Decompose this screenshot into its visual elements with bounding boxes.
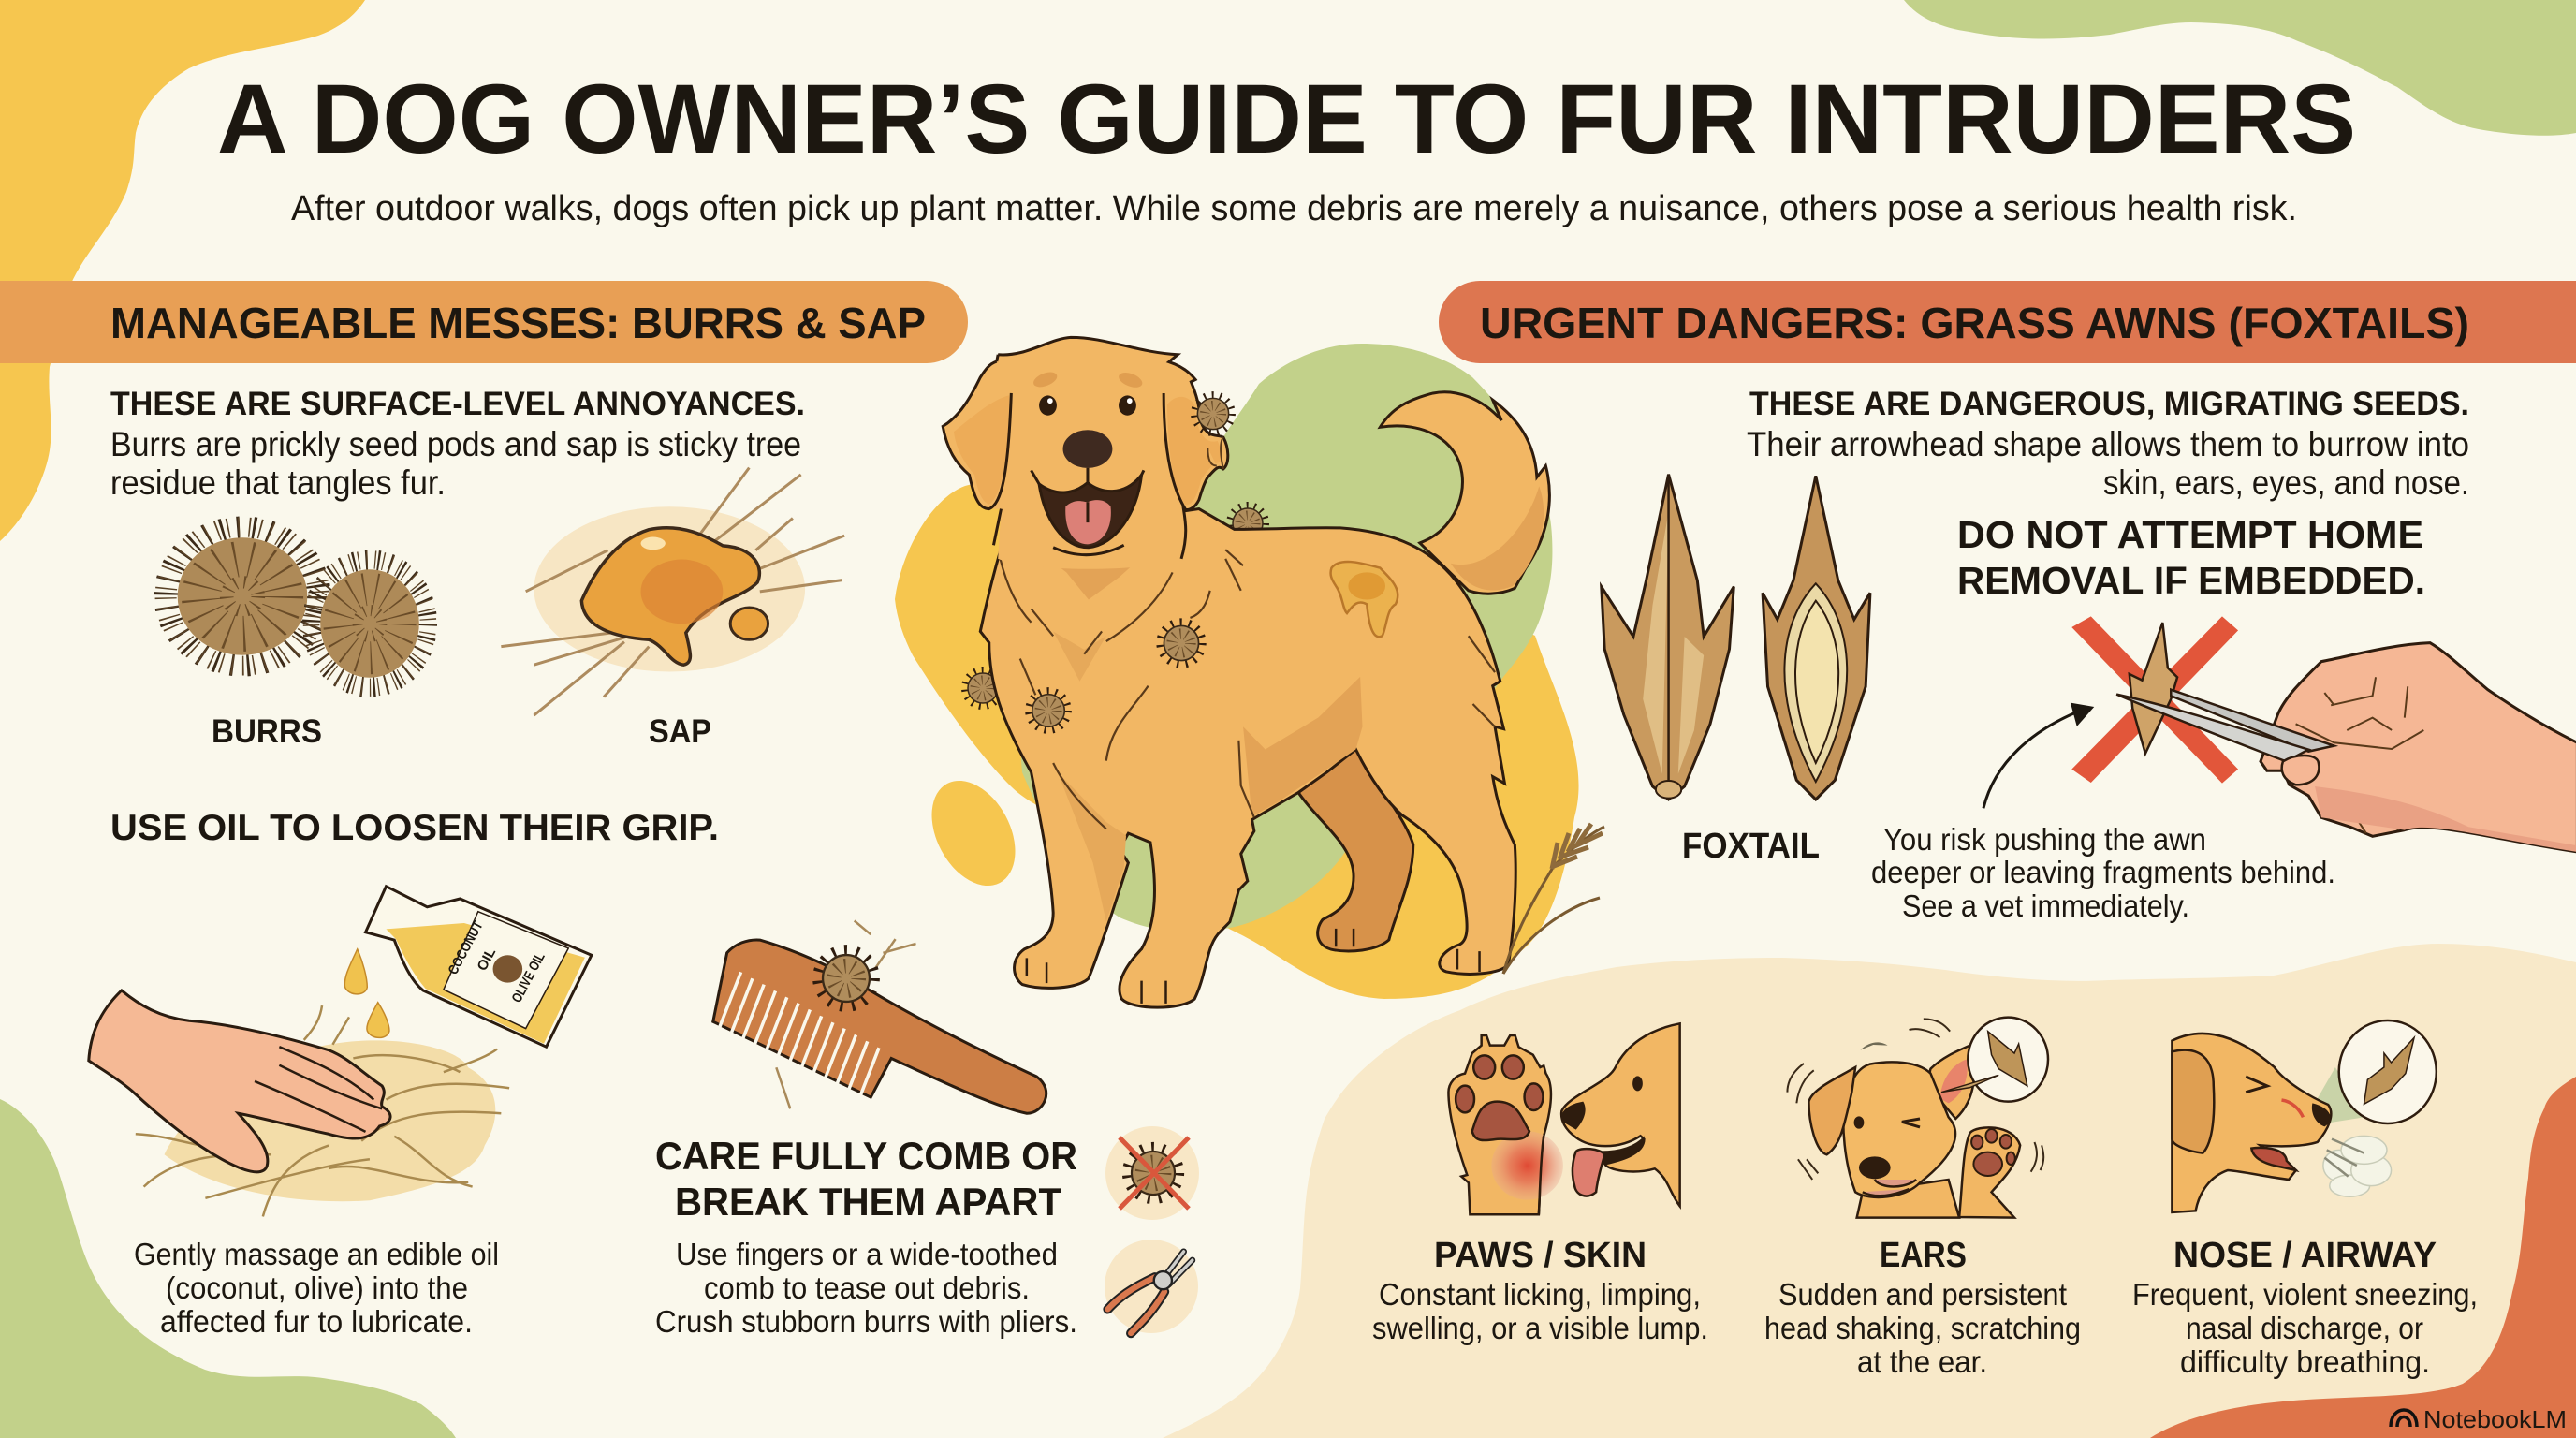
subtitle: After outdoor walks, dogs often pick up plant matter. While some debris are merely a nuisance, others pose a serious health risk. xyxy=(291,189,2297,228)
icon: pliers xyxy=(1105,1240,1198,1333)
ear shading xyxy=(954,395,1009,505)
icon: two burrs xyxy=(166,527,428,687)
icon: crossed-out burr xyxy=(1105,1126,1199,1220)
blob: green top right xyxy=(1904,0,2576,136)
text block: ears: head shaking, scratching xyxy=(1764,1311,2081,1345)
heading: do not attempt: DO NOT ATTEMPT HOME xyxy=(1957,513,2423,556)
icon: grass stem by dog xyxy=(1503,824,1604,974)
panel: urgent dangers banner: URGENT DANGERS: GRASS AWNS (FOXTAILS) xyxy=(1480,299,2469,347)
fur patch xyxy=(165,1040,495,1201)
panel: symptoms background xyxy=(1163,944,2576,1438)
panel: manageable messes banner xyxy=(0,281,968,363)
heading: care fully comb: CARE FULLY COMB OR xyxy=(655,1134,1077,1178)
text block: nose and airway xyxy=(2132,1236,2478,1379)
thumb xyxy=(2282,756,2319,785)
text block: ears xyxy=(1764,1236,2081,1379)
blob: yellow top left xyxy=(0,0,365,541)
fur strands xyxy=(136,1005,509,1216)
icon: foxtail seed inside xyxy=(1763,476,1870,800)
text block: dangerous seeds intro: skin, ears, eyes, and nose. xyxy=(2103,463,2469,502)
text block: risk warning: deeper or leaving fragments behind. xyxy=(1871,855,2335,889)
sap patch xyxy=(1331,562,1398,637)
brows and eyes xyxy=(1032,369,1059,389)
illustration: golden retriever xyxy=(943,337,1549,1007)
text block: oil instructions xyxy=(134,1237,499,1339)
icon: paw and licking dog xyxy=(1448,1023,1680,1214)
dog body xyxy=(943,337,1549,1007)
red X xyxy=(2071,616,2238,784)
text block: comb instructions: comb to tease out debris. xyxy=(704,1270,1030,1305)
text block: burrs and sap intro: THESE ARE SURFACE-LEVEL ANNOYANCES. xyxy=(110,386,805,422)
text block: paws and skin: PAWS / SKIN xyxy=(1434,1236,1647,1275)
illustration: comb with burr xyxy=(713,921,1046,1113)
blob: green behind dog xyxy=(1021,344,1552,932)
text block: risk warning: You risk pushing the awn xyxy=(1883,822,2206,857)
heading: do not attempt: REMOVAL IF EMBEDDED. xyxy=(1957,559,2425,602)
text block: nose and airway: Frequent, violent sneezing, xyxy=(2132,1277,2478,1312)
illustration: oil bottle: OIL xyxy=(475,946,499,974)
text block: risk warning: See a vet immediately. xyxy=(1902,888,2189,923)
text block: nose and airway: nasal discharge, or xyxy=(2186,1311,2423,1345)
blob: orange bottom right xyxy=(2150,1077,2576,1438)
logo: NotebookLM: NotebookLM xyxy=(2423,1405,2567,1433)
label: sap: SAP xyxy=(649,713,711,750)
icon: dog scratching ear xyxy=(1787,1018,2048,1218)
arrow xyxy=(1983,712,2078,808)
illustration: hand massaging oil xyxy=(89,990,509,1216)
head outline xyxy=(943,337,1228,559)
fur shading xyxy=(1243,677,1362,816)
text block: risk warning xyxy=(1871,822,2335,923)
text block: comb instructions: Crush stubborn burrs with pliers. xyxy=(655,1304,1077,1339)
text block: ears: Sudden and persistent xyxy=(1778,1277,2067,1312)
illustration: oil bottle: COCONUT xyxy=(446,918,487,977)
text block: burrs and sap intro: residue that tangles fur. xyxy=(110,463,446,502)
panel: urgent dangers banner xyxy=(1439,281,2576,363)
text block: nose and airway: NOSE / AIRWAY xyxy=(2174,1236,2437,1275)
panel: manageable messes banner: MANAGEABLE MESSES: BURRS & SAP xyxy=(110,299,926,347)
text block: dangerous seeds intro: Their arrowhead shape allows them to burrow into xyxy=(1747,425,2469,463)
text block: paws and skin: Constant licking, limping, xyxy=(1379,1277,1701,1312)
text block: comb instructions: Use fingers or a wide-toothed xyxy=(676,1237,1058,1271)
illustration: do not use tweezers xyxy=(1983,616,2576,852)
text block: oil instructions: (coconut, olive) into the xyxy=(166,1270,468,1305)
embedded awn xyxy=(2130,623,2177,754)
blob: small yellow oval xyxy=(915,767,1032,900)
head fill xyxy=(943,337,1228,569)
illustration: oil bottle xyxy=(344,887,592,1047)
text block: paws and skin xyxy=(1372,1236,1708,1345)
text block: burrs and sap intro xyxy=(110,386,805,502)
text block: nose and airway: difficulty breathing. xyxy=(2180,1344,2430,1379)
title: A DOG OWNER’S GUIDE TO FUR INTRUDERS xyxy=(217,65,2356,174)
label: burrs: BURRS xyxy=(212,713,322,750)
illustration: oil bottle: OLIVE OIL xyxy=(509,950,549,1005)
heading: use oil: USE OIL TO LOOSEN THEIR GRIP. xyxy=(110,808,719,848)
label: foxtail: FOXTAIL xyxy=(1682,827,1820,866)
text block: comb instructions xyxy=(655,1237,1077,1339)
icon: sap blob xyxy=(501,468,844,715)
text block: dangerous seeds intro xyxy=(1747,386,2469,502)
tail xyxy=(1380,392,1549,594)
text block: burrs and sap intro: Burrs are prickly seed pods and sap is sticky tree xyxy=(110,425,801,463)
text block: oil instructions: affected fur to lubricate. xyxy=(160,1304,473,1339)
heading: do not attempt xyxy=(1957,513,2425,602)
heading: care fully comb: BREAK THEM APART xyxy=(675,1180,1061,1224)
hand xyxy=(2261,643,2576,852)
heading: care fully comb xyxy=(655,1134,1077,1224)
text block: oil instructions: Gently massage an edible oil xyxy=(134,1237,499,1271)
blob: green bottom left xyxy=(0,1099,456,1438)
nose xyxy=(1063,430,1112,468)
text block: ears: EARS xyxy=(1880,1236,1967,1275)
text block: paws and skin: swelling, or a visible lump. xyxy=(1372,1311,1708,1345)
ear canal xyxy=(1208,437,1223,469)
torso and near legs xyxy=(980,509,1515,1007)
tweezers xyxy=(2171,690,2334,752)
text block: dangerous seeds intro: THESE ARE DANGEROUS, MIGRATING SEEDS. xyxy=(1749,386,2469,422)
blob: yellow behind dog xyxy=(895,482,1579,999)
burrs behind dog xyxy=(966,506,1266,706)
text block: ears: at the ear. xyxy=(1857,1344,1987,1379)
mouth xyxy=(1039,475,1142,548)
icon: foxtail seed outside xyxy=(1602,475,1734,800)
hand xyxy=(89,990,390,1172)
icon: dog sneezing xyxy=(2172,1020,2437,1212)
burrs on dog xyxy=(1030,396,1231,729)
far hind leg xyxy=(1298,749,1413,951)
